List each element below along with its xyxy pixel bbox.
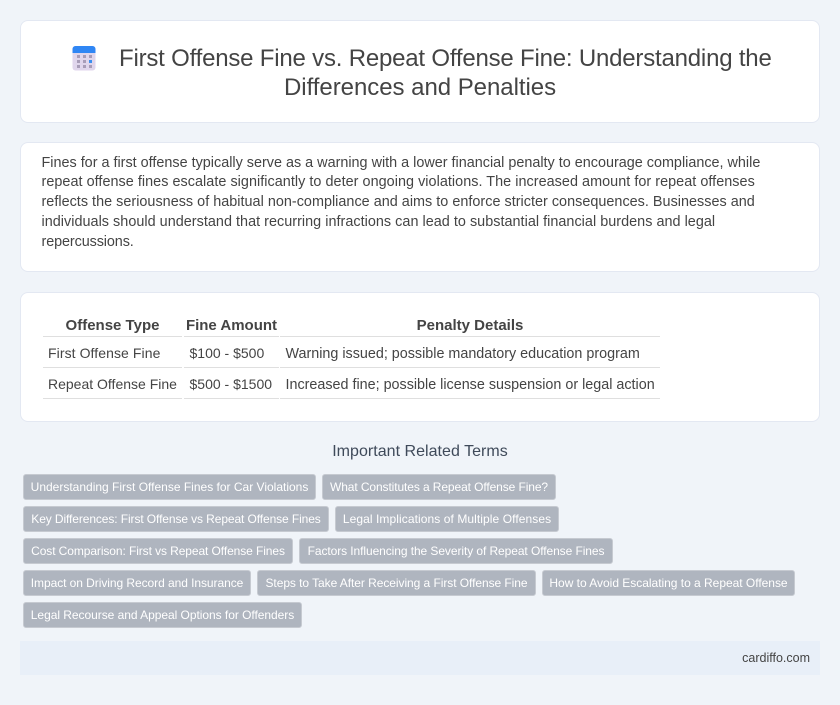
row: first offense amount: $100 - $500 [190,345,264,361]
footer source: cardiffo.com [742,651,810,665]
chip [23,506,329,532]
row: repeat offense details: Increased fine; possible license suspension or legal action [286,377,655,393]
icon: calendar [72,46,96,70]
panel: introduction [20,142,820,272]
chip: Legal Recourse and Appeal Options for Offenders [31,608,294,622]
chip: Cost Comparison: First vs Repeat Offense Fines [31,544,285,558]
panel: comparison table [20,292,820,422]
chip: Understanding First Offense Fines for Car Violations [31,480,308,494]
row: first offense type: First Offense Fine [48,345,160,361]
footer bar [20,641,820,675]
intro line 4: individuals should understand that recurring infractions can lead to substantial financial burdens and legal [42,214,715,230]
title line 1: First Offense Fine vs. Repeat Offense Fine: Understanding the [119,45,772,72]
chip [542,570,795,596]
chip [23,570,251,596]
row: first offense details: Warning issued; possible mandatory education program [286,346,640,362]
chip [257,570,536,596]
row: repeat offense amount: $500 - $1500 [190,376,272,392]
chip [322,474,556,500]
chip [23,538,293,564]
heading: related terms: Important Related Terms [332,443,508,460]
chip: Impact on Driving Record and Insurance [31,576,243,590]
chip: Factors Influencing the Severity of Repeat Offense Fines [308,544,604,558]
intro line 3: reflects the seriousness of habitual non-compliance and aims to enforce stricter consequences. Businesses and [42,194,755,210]
chip: Legal Implications of Multiple Offenses [343,512,551,526]
table header: offense type: Offense Type [66,317,159,334]
related terms chips [23,474,795,628]
chip [23,602,302,628]
chip: Key Differences: First Offense vs Repeat Offense Fines [31,512,321,526]
chip [299,538,613,564]
intro line 5: repercussions. [42,234,134,250]
chip [23,474,316,500]
chip: Steps to Take After Receiving a First Offense Fine [265,576,528,590]
chip: What Constitutes a Repeat Offense Fine? [330,480,548,494]
intro line 2: repeat offense fines escalate significantly to deter ongoing violations. The increased amount for repeat offenses [42,174,755,190]
table header: penalty details: Penalty Details [417,317,523,334]
intro line 1: Fines for a first offense typically serve as a warning with a lower financial penalty to encourage compliance, while [42,155,760,171]
chip [335,506,559,532]
title line 2: Differences and Penalties [284,74,556,101]
table header: fine amount: Fine Amount [186,317,277,334]
chip: How to Avoid Escalating to a Repeat Offense [549,576,788,590]
row: repeat offense type: Repeat Offense Fine [48,376,177,392]
panel: title header [20,20,820,123]
